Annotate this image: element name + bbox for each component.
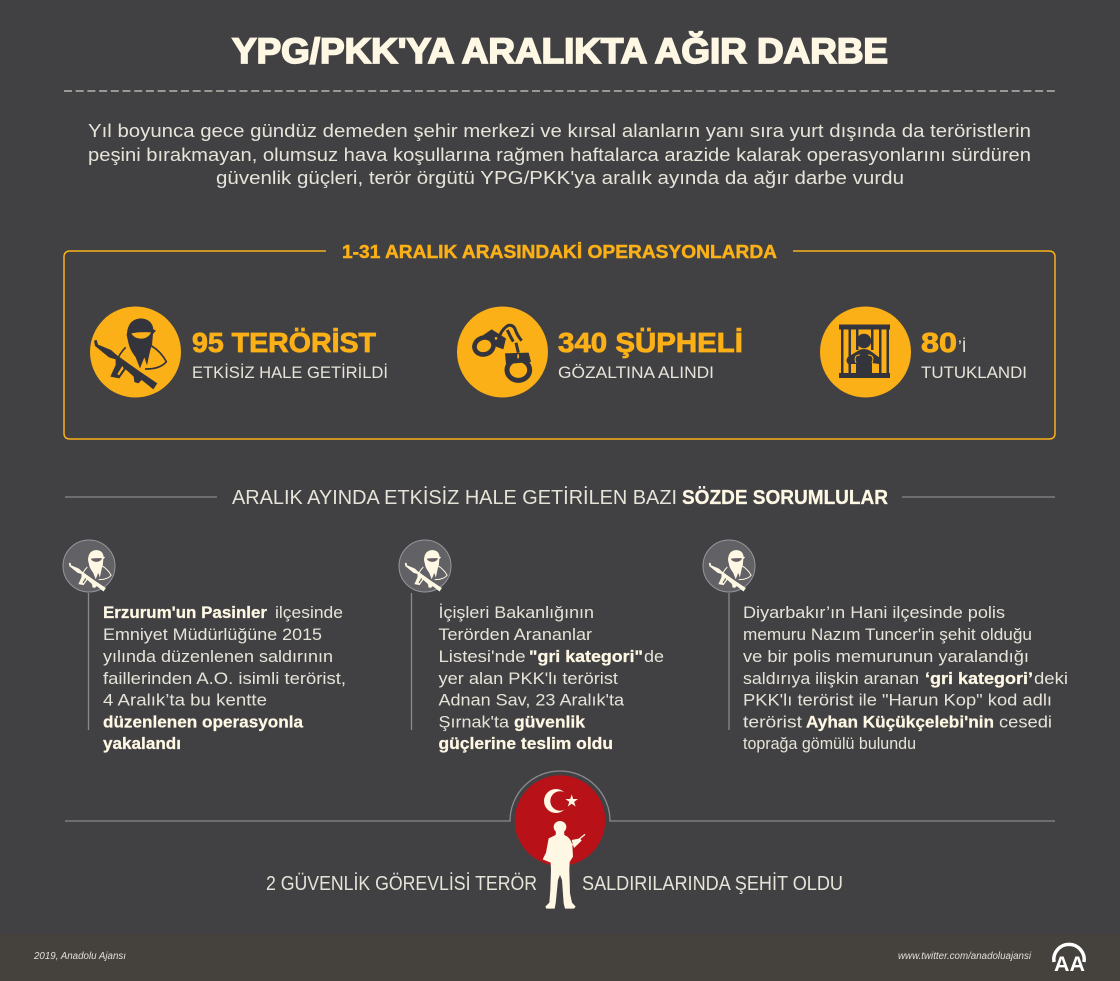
casualties text — [266, 872, 843, 895]
stat: 95 terrorists — [192, 327, 388, 382]
column 3 — [703, 540, 1068, 753]
text block: toprağa gömülü bulundu — [743, 734, 916, 753]
text block: yılında düzenlenen saldırının — [103, 647, 333, 666]
text block: cesedi — [999, 712, 1052, 732]
icon: terrorist — [90, 306, 181, 398]
stat: 95 terrorists: ETKİSİZ HALE GETİRİLDİ — [192, 363, 388, 382]
text block: Terörden Arananlar — [438, 625, 592, 644]
stat: 340 suspects: GÖZALTINA ALINDI — [558, 363, 714, 382]
text block: terörist — [743, 712, 802, 732]
title: YPG/PKK'YA ARALIKTA AĞIR DARBE — [232, 31, 888, 71]
panel heading: 1-31 ARALIK ARASINDAKİ OPERASYONLARDA — [342, 241, 777, 262]
intro text: peşini bırakmayan, olumsuz hava koşullarına rağmen haftalarca arazide kalarak operasyonlarını sürdüren — [88, 145, 1031, 165]
text block: deki — [1034, 669, 1068, 688]
icon: handcuffs — [457, 306, 548, 397]
text block: ‘gri kategori’ — [925, 669, 1033, 688]
stat: 80 arrested: 80 — [921, 327, 957, 358]
text block: güçlerine teslim oldu — [438, 734, 613, 753]
panel: operations — [64, 241, 1055, 439]
column 1 — [63, 540, 346, 753]
text block: Adnan Sav, 23 Aralık'ta — [438, 690, 625, 710]
text block: saldırıya ilişkin aranan — [743, 669, 919, 688]
section heading: ARALIK AYINDA ETKİSİZ HALE GETİRİLEN BAZI — [232, 486, 677, 509]
icon: small terrorist — [63, 540, 115, 592]
twitter url: www.twitter.com/anadoluajansi — [898, 951, 1032, 962]
stat: 80 arrested: TUTUKLANDI — [921, 363, 1027, 382]
intro text: güvenlik güçleri, terör örgütü YPG/PKK'ya aralık ayında da ağır darbe vurdu — [216, 168, 904, 188]
text block: memuru Nazım Tuncer'in şehit olduğu — [743, 625, 1032, 644]
text block — [438, 603, 664, 753]
text block: güvenlik — [514, 712, 586, 732]
icon: AA logo: AA — [1054, 953, 1085, 976]
stat: 340 suspects: 340 ŞÜPHELİ — [558, 327, 743, 358]
text block: ve bir polis memurunun yaralandığı — [743, 647, 1029, 666]
icon: small terrorist — [703, 540, 755, 592]
stat: 95 terrorists: 95 TERÖRİST — [192, 327, 376, 358]
text block: faillerinden A.O. isimli terörist, — [103, 669, 346, 688]
stat: 80 arrested: ’İ — [958, 337, 966, 356]
column 2 — [399, 540, 664, 753]
text block: ilçesinde — [275, 603, 343, 622]
icon: prisoner behind bars — [820, 306, 911, 398]
text block: Emniyet Müdürlüğüne 2015 — [103, 625, 322, 644]
casualties text: 2 GÜVENLİK GÖREVLİSİ TERÖR — [266, 872, 537, 895]
icon: soldier — [543, 821, 585, 909]
text block: "gri kategori" — [529, 647, 643, 666]
text block: Erzurum'un Pasinler — [103, 603, 267, 622]
copyright: 2019, Anadolu Ajansı — [33, 951, 126, 962]
text block: 4 Aralık’ta bu kentte — [103, 690, 267, 710]
text block: yer alan PKK'lı terörist — [438, 669, 618, 688]
icon: flag circle with soldier — [515, 775, 605, 909]
text block: Diyarbakır’ın Hani ilçesinde polis — [743, 603, 1005, 622]
intro text: Yıl boyunca gece gündüz demeden şehir merkezi ve kırsal alanların yanı sıra yurt dışında da teröristlerin — [88, 121, 1031, 141]
text block: Listesi'nde — [438, 647, 526, 666]
text block: PKK'lı terörist ile "Harun Kop" kod adlı — [743, 690, 1052, 710]
text block: yakalandı — [103, 734, 181, 753]
text block — [103, 603, 346, 753]
intro text — [88, 121, 1031, 188]
section heading: SÖZDE SORUMLULAR — [682, 486, 888, 509]
casualties text: SALDIRILARINDA ŞEHİT OLDU — [582, 872, 843, 895]
stat: 340 suspects — [558, 327, 743, 382]
text block: düzenlenen operasyonla — [103, 712, 304, 732]
icon: crescent and star — [544, 789, 578, 813]
text block: İçişleri Bakanlığının — [438, 603, 594, 622]
divider with arch — [65, 771, 1055, 821]
text block — [743, 603, 1068, 753]
footer — [0, 934, 1120, 981]
text block: Şırnak'ta — [438, 712, 510, 732]
section heading — [65, 486, 1055, 509]
stat: 80 arrested — [921, 327, 1027, 382]
icon: small terrorist — [399, 540, 451, 592]
text block: Ayhan Küçükçelebi'nin — [806, 712, 994, 732]
text block: de — [644, 647, 664, 666]
